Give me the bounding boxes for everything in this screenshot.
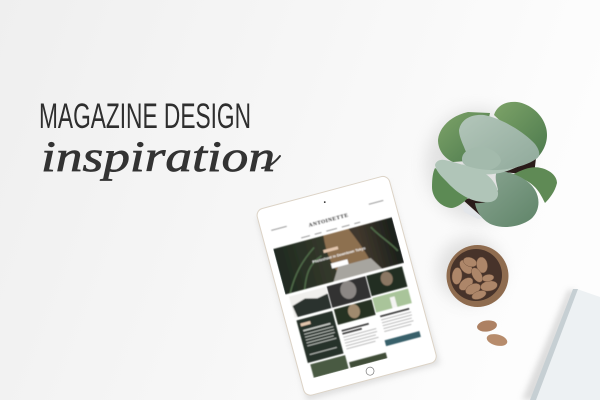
- leaf: left lower: [432, 168, 470, 208]
- notebook shadow: [522, 290, 575, 400]
- tablet shadow: [257, 182, 440, 400]
- article card dark: [296, 311, 344, 363]
- site nav: [271, 200, 387, 245]
- leaf: left upper: [438, 112, 490, 162]
- bottom image strip: [310, 355, 349, 378]
- heading: magazine design: MAGAZINE DESIGN: [39, 97, 251, 136]
- pot: [461, 202, 484, 219]
- bowl inner: [450, 249, 502, 301]
- almonds in bowl: [451, 255, 498, 301]
- leaf: bottom large: [475, 171, 538, 227]
- loose almond one: [476, 319, 498, 333]
- bowl of almonds: [438, 238, 508, 307]
- loose almond two: [485, 332, 509, 348]
- image card row 2: [334, 299, 376, 325]
- tablet: [256, 175, 440, 400]
- leaf: center small: [462, 147, 501, 171]
- notebook spine: [530, 289, 578, 400]
- leaf: top right: [494, 102, 547, 158]
- tablet screen: Photoshoot in Downtown Tokyo: [312, 246, 367, 264]
- site masthead: ANTOINETTE: [308, 213, 349, 229]
- plant shadow: [426, 109, 530, 221]
- image card row 1: [289, 287, 331, 318]
- hero tag and title: [323, 246, 338, 253]
- bowl rim: [446, 245, 508, 307]
- tablet home button: [365, 366, 375, 376]
- tablet body: [256, 175, 438, 397]
- notebook: [522, 289, 600, 400]
- leaf: right: [512, 167, 557, 203]
- leaf: lower pale: [435, 160, 498, 202]
- heading: inspiration script: inspiration: [41, 134, 275, 181]
- notebook cover: [536, 289, 600, 400]
- hero image: [273, 217, 404, 294]
- leaf: large pale: [459, 115, 539, 172]
- bowl shadow: [438, 238, 502, 302]
- plant: [426, 102, 557, 227]
- tablet camera: [324, 201, 326, 203]
- tablet screen: [270, 200, 422, 378]
- article text columns: [340, 308, 411, 335]
